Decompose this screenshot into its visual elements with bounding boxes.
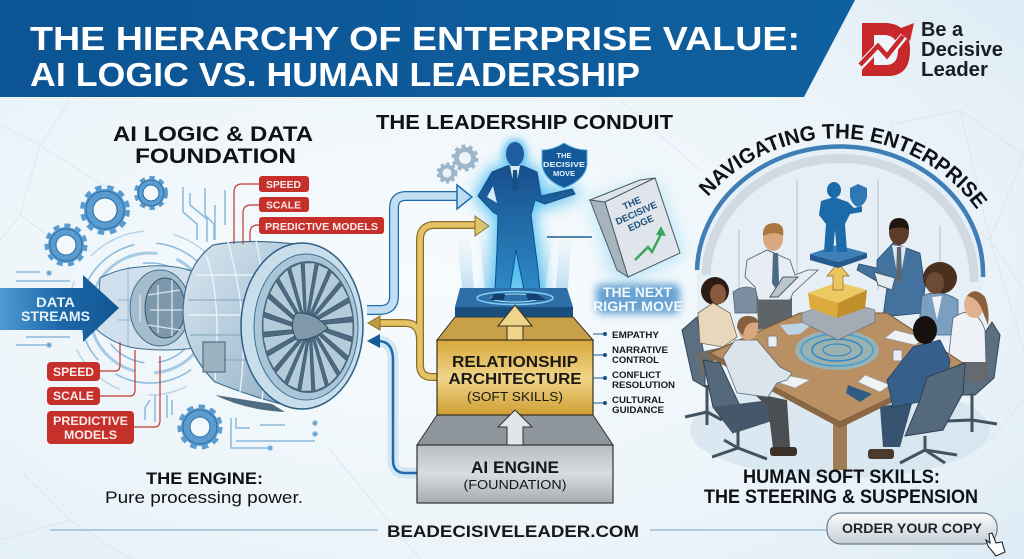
logo: Be a Decisive Leader: Decisive <box>921 39 1003 61</box>
book: the decisive edge: DECISIVE <box>614 200 659 228</box>
soft skills list: GUIDANCE <box>612 405 664 415</box>
arrow: gold to leader and engine <box>368 216 489 377</box>
soft skills list: CULTURAL <box>612 395 665 405</box>
soft skills list <box>593 330 675 415</box>
book: the decisive edge <box>590 178 685 282</box>
seated man front left <box>723 316 797 456</box>
caption: human soft skills: HUMAN SOFT SKILLS: <box>743 467 940 488</box>
standing man right <box>857 218 925 317</box>
up arrow <box>827 263 849 290</box>
chair: left seated woman <box>682 317 705 387</box>
label: the next right move: THE NEXT <box>603 284 672 300</box>
relationship architecture block: (SOFT SKILLS) <box>467 389 563 404</box>
small leader figure <box>819 182 867 252</box>
relationship architecture block <box>437 305 593 415</box>
callouts: lower engine labels: SCALE <box>53 391 94 403</box>
seated man front right <box>868 316 950 459</box>
footer line <box>50 529 828 531</box>
heading: the leadership conduit: THE LEADERSHIP CONDUIT <box>376 112 673 134</box>
leader platform <box>455 288 573 326</box>
callouts: lower engine labels: SPEED <box>53 367 94 379</box>
title: THE HIERARCHY OF ENTERPRISE VALUE: <box>30 20 800 57</box>
seated woman left <box>695 277 737 377</box>
data flow arcs and circuits <box>16 187 317 450</box>
chair base left <box>685 385 722 425</box>
leader figure <box>478 139 575 300</box>
icon: hand cursor <box>986 533 1005 556</box>
button: order your copy <box>827 513 997 544</box>
small gears <box>438 147 476 182</box>
caption: the engine: THE ENGINE: <box>146 469 263 488</box>
dome arc and room <box>697 146 983 340</box>
callouts: lower engine labels: MODELS <box>64 430 117 442</box>
callouts: top engine labels: SPEED <box>266 179 301 191</box>
badge: the decisive move: THE <box>556 151 572 160</box>
arrow: grey up arrow <box>498 410 532 445</box>
chair front left <box>703 360 775 459</box>
heading: AI logic and data foundation: AI LOGIC & DATA <box>113 122 313 146</box>
arrow: data streams: STREAMS <box>21 309 90 324</box>
button: order your copy: ORDER YOUR COPY <box>842 521 982 536</box>
soft skills list: EMPATHY <box>612 330 659 340</box>
table top <box>710 313 963 422</box>
logo: Be a Decisive Leader <box>858 19 1003 81</box>
heading: AI logic and data foundation <box>113 122 313 168</box>
hologram rings <box>795 330 879 370</box>
meeting scene <box>682 182 1000 478</box>
callouts: top engine labels <box>234 176 384 244</box>
book: the decisive edge: EDGE <box>627 213 656 234</box>
label: the next right move: RIGHT MOVE <box>593 298 683 314</box>
chair front right <box>900 363 965 463</box>
caption: the engine <box>105 469 303 507</box>
chair: right <box>960 322 1000 395</box>
arrow: data streams <box>0 275 119 342</box>
badge: the decisive move: DECISIVE <box>543 160 585 169</box>
caption: human soft skills <box>704 467 978 508</box>
seated woman back right <box>918 262 958 335</box>
engine hub cone <box>292 313 328 340</box>
AI engine block: (FOUNDATION) <box>464 477 566 492</box>
engine nose section <box>97 266 195 350</box>
footer url: BEADECISIVELEADER.COM <box>387 522 639 541</box>
header banner <box>0 0 855 97</box>
jet engine <box>97 240 363 412</box>
papers <box>780 322 815 335</box>
AI engine block <box>417 415 613 503</box>
callouts: top engine labels: PREDICTIVE MODELS <box>265 221 378 233</box>
title <box>30 20 800 93</box>
soft skills list: RESOLUTION <box>612 380 675 390</box>
logo: Be a Decisive Leader: Be a <box>921 19 964 41</box>
arrow: dark blue from AI engine <box>367 334 417 473</box>
chair: back left <box>733 287 757 313</box>
engine front ring <box>241 243 363 409</box>
heading: navigating the enterprise (curved): NAVIGATING THE ENTERPRISE <box>698 124 988 210</box>
engine cowl <box>183 242 302 409</box>
connector <box>547 236 592 238</box>
grey slab <box>802 300 875 340</box>
floor shadow <box>690 382 990 478</box>
small platform <box>810 245 867 268</box>
chair base right <box>947 393 997 432</box>
arrow: light blue to leader <box>367 185 472 310</box>
title: AI LOGIC VS. HUMAN LEADERSHIP <box>30 56 640 93</box>
caption: human soft skills: THE STEERING & SUSPENSION <box>704 487 978 508</box>
table leg <box>833 420 847 470</box>
relationship architecture block: RELATIONSHIP <box>452 354 578 371</box>
callouts: lower engine labels: PREDICTIVE <box>53 416 128 428</box>
light beams <box>456 225 572 290</box>
arrow: data streams: DATA <box>36 295 75 310</box>
book: the decisive edge: THE <box>621 195 643 213</box>
seated woman far right <box>948 291 989 382</box>
AI engine block: AI ENGINE <box>471 459 559 477</box>
soft skills list: NARRATIVE <box>612 345 668 355</box>
logo: Be a Decisive Leader: Leader <box>921 59 988 81</box>
standing man left <box>745 223 818 330</box>
icon: gears left <box>48 179 219 446</box>
gold cube <box>808 282 867 318</box>
relationship architecture block: ARCHITECTURE <box>448 371 582 388</box>
callouts: top engine labels: SCALE <box>266 200 301 212</box>
heading: AI logic and data foundation: FOUNDATION <box>135 144 296 168</box>
badge: the decisive move <box>542 143 587 188</box>
soft skills list: CONFLICT <box>612 370 662 380</box>
label: the next right move <box>593 284 683 314</box>
soft skills list: CONTROL <box>612 355 660 365</box>
fan blades <box>262 261 354 393</box>
caption: the engine: Pure processing power. <box>105 488 303 507</box>
callouts: lower engine labels <box>47 342 160 444</box>
badge: the decisive move: MOVE <box>553 169 575 178</box>
